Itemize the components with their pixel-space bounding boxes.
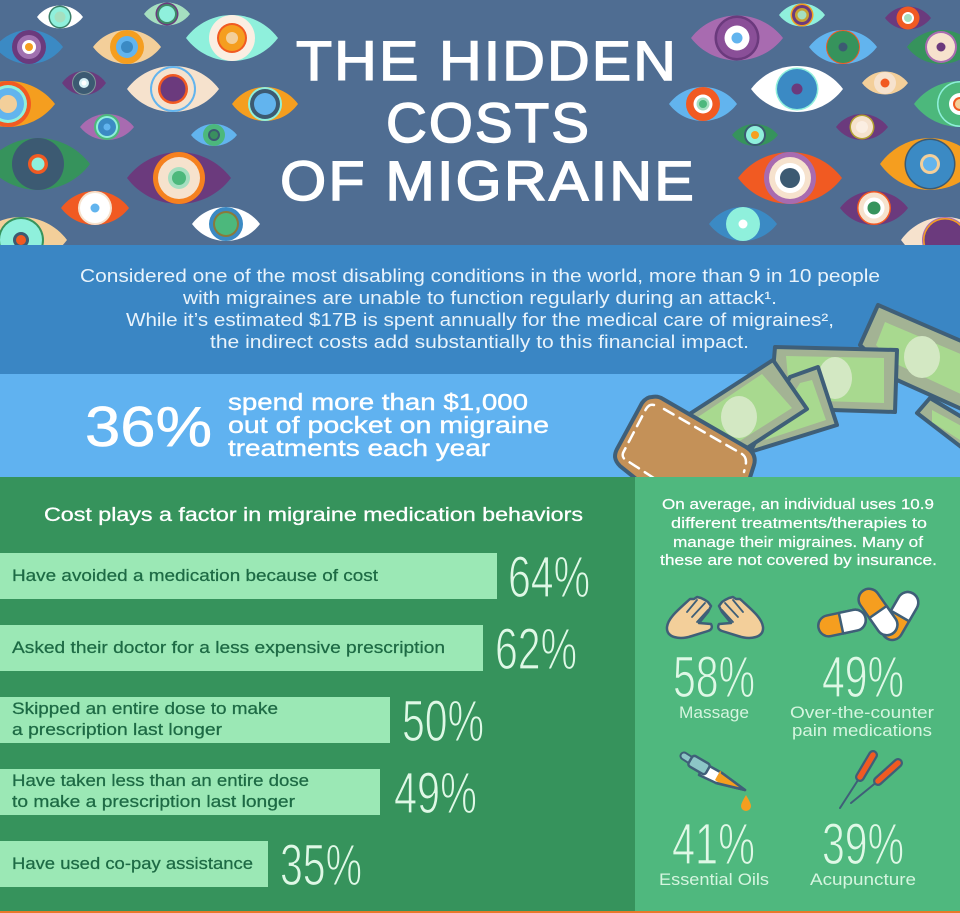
- bar: skipped dose 50%: a prescription last longer: [12, 720, 222, 739]
- treatments intro text: different treatments/therapies to: [671, 515, 927, 532]
- statistic: massage 58%: [673, 645, 755, 722]
- icon: acupuncture needles: [840, 755, 898, 808]
- eyes pattern left: [0, 2, 298, 263]
- statistic: OTC pain medications 49%: [790, 645, 934, 740]
- bar: avoided medication 64%: [0, 545, 590, 610]
- bar: avoided medication 64%: Have avoided a medication because of cost: [12, 566, 378, 585]
- statistic: essential oils 41%: Essential Oils: [659, 870, 769, 889]
- treatments intro text: these are not covered by insurance.: [660, 552, 937, 569]
- title: COSTS: [386, 91, 591, 154]
- statistic: essential oils 41%: 41%: [672, 812, 755, 877]
- panel: intro band: [0, 245, 960, 375]
- bar: less expensive prescription 62%: [0, 617, 577, 682]
- bar: less expensive prescription 62%: 62%: [495, 617, 577, 682]
- heading: medication behaviors: Cost plays a factor in migraine medication behaviors: [44, 505, 583, 526]
- bar: co-pay assistance 35%: Have used co-pay assistance: [12, 854, 253, 873]
- bar: less than entire dose 49%: Have taken less than an entire dose: [12, 771, 309, 790]
- statistic: massage 58%: 58%: [673, 645, 755, 710]
- bar: skipped dose 50%: [0, 689, 484, 754]
- statistic: massage 58%: Massage: [679, 703, 749, 722]
- statistic: acupuncture 39%: Acupuncture: [810, 870, 916, 889]
- statistic: 36%: 36%: [85, 395, 212, 459]
- statistic: essential oils 41%: [659, 812, 769, 889]
- statistic: OTC pain medications 49%: pain medications: [792, 721, 932, 740]
- title: OF MIGRAINE: [280, 149, 696, 212]
- icon: wallet and cash: [615, 305, 960, 490]
- bar: co-pay assistance 35%: 35%: [280, 833, 362, 898]
- panel: out-of-pocket band: [0, 374, 960, 477]
- header background: [0, 0, 960, 245]
- intro text: Considered one of the most disabling conditions in the world, more than 9 in 10 people: [80, 266, 880, 286]
- bar: co-pay assistance 35%: [0, 833, 362, 898]
- treatments intro text: manage their migraines. Many of: [673, 534, 924, 551]
- panel: medication behaviors: [0, 477, 636, 911]
- intro text: While it’s estimated $17B is spent annually for the medical care of migraines²,: [126, 310, 834, 330]
- bar: less than entire dose 49%: to make a prescription last longer: [12, 792, 295, 811]
- bar: less expensive prescription 62%: Asked their doctor for a less expensive prescription: [12, 638, 445, 657]
- intro text: with migraines are unable to function regularly during an attack¹.: [182, 288, 777, 308]
- bar: avoided medication 64%: 64%: [508, 545, 590, 610]
- icon: pills: [816, 585, 922, 644]
- out-of-pocket text: [228, 389, 549, 461]
- bar: skipped dose 50%: Skipped an entire dose to make: [12, 699, 278, 718]
- statistic: acupuncture 39%: [810, 812, 916, 889]
- out-of-pocket text: out of pocket on migraine: [228, 412, 549, 438]
- icon: hands: [667, 597, 763, 638]
- intro text: [80, 266, 880, 352]
- statistic: acupuncture 39%: 39%: [822, 812, 904, 877]
- bar: less than entire dose 49%: [0, 761, 477, 826]
- title: [280, 29, 696, 212]
- title: THE HIDDEN: [296, 29, 678, 92]
- panel: treatments: [635, 477, 960, 911]
- bar: less than entire dose 49%: 49%: [394, 761, 477, 826]
- out-of-pocket text: spend more than $1,000: [228, 389, 528, 415]
- out-of-pocket text: treatments each year: [228, 435, 490, 461]
- statistic: OTC pain medications 49%: Over-the-counter: [790, 703, 934, 722]
- intro text: the indirect costs add substantially to this financial impact.: [210, 332, 749, 352]
- bar: skipped dose 50%: 50%: [402, 689, 484, 754]
- treatments intro text: On average, an individual uses 10.9: [662, 496, 934, 513]
- icon: dropper: [684, 755, 751, 811]
- treatments intro text: [660, 496, 937, 569]
- bottom accent line: [0, 911, 960, 913]
- statistic: OTC pain medications 49%: 49%: [822, 645, 904, 710]
- eyes pattern right: [669, 4, 960, 263]
